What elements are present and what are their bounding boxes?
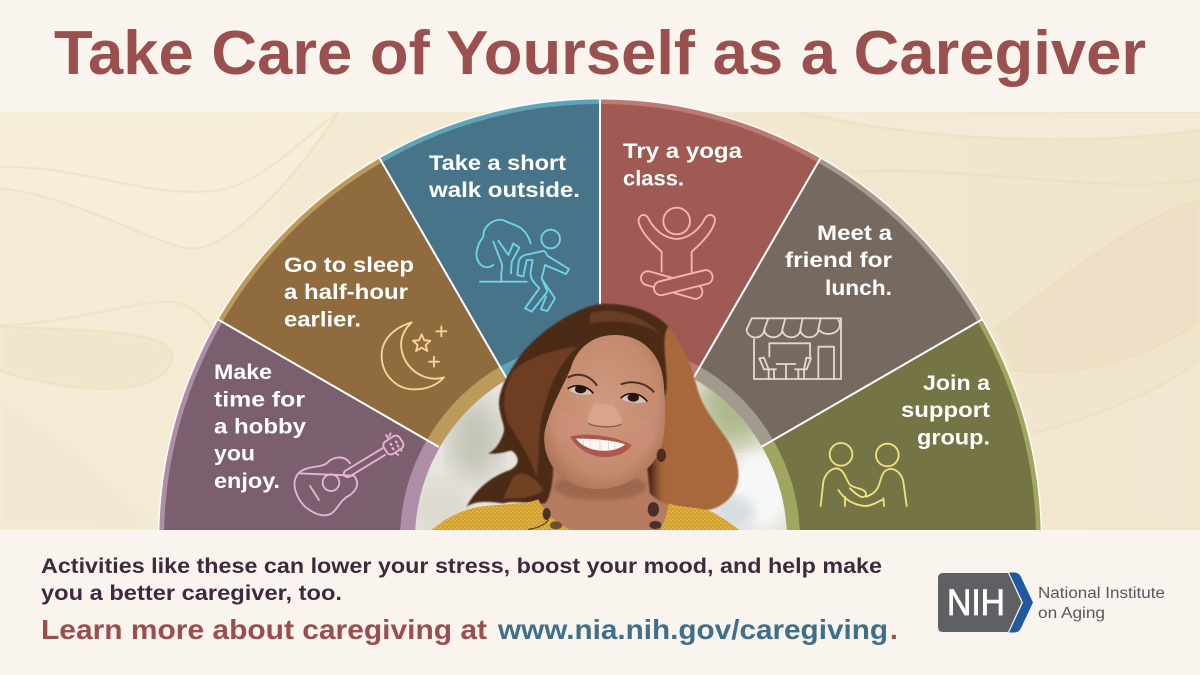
panel: support wedge <box>762 320 1041 530</box>
call to action with link: Learn more about caregiving at <box>41 614 487 645</box>
eyebrows <box>568 375 653 392</box>
text: walk: Take a short <box>429 152 566 175</box>
icon: moon and stars <box>382 322 446 389</box>
logo letters: NIH <box>947 582 1005 623</box>
woman <box>432 304 740 533</box>
text: hobby: Make <box>214 361 272 384</box>
title: Take Care of Yourself as a Caregiver <box>54 19 1146 88</box>
necklace <box>528 502 661 529</box>
body text: Activities like these can lower your stress, boost your mood, and help make <box>41 554 882 578</box>
photo backdrop <box>415 379 787 530</box>
wheel outline and separators <box>158 99 1042 540</box>
text: hobby: you <box>214 442 255 466</box>
eyes <box>568 385 647 403</box>
icon: guitar <box>295 433 405 515</box>
panel: lunch wedge <box>694 159 982 446</box>
icon: tree and walker <box>476 220 569 312</box>
NIH logo <box>938 572 1165 632</box>
panel: yoga wedge <box>601 99 820 376</box>
panel: sleep wedge <box>218 158 507 448</box>
text: support <box>901 372 990 450</box>
face <box>544 335 665 489</box>
text: yoga <box>623 140 742 190</box>
text: hobby: time for <box>214 388 305 412</box>
cheeks <box>553 412 655 448</box>
text: sleep: a half-hour <box>284 281 408 304</box>
mouth <box>570 435 632 457</box>
text: support: Join a <box>923 372 990 395</box>
text: walk: walk outside. <box>428 179 580 202</box>
text: support: support <box>901 399 990 422</box>
call to action with link: www.nia.nih.gov/caregiving <box>497 614 888 645</box>
call to action with link: . <box>890 614 898 645</box>
text: lunch: friend for <box>785 249 892 272</box>
text: sleep <box>284 254 414 332</box>
logo wordmark: National Institute <box>1038 585 1165 602</box>
hair <box>467 304 738 510</box>
text: lunch <box>785 222 892 300</box>
text: yoga: class. <box>623 168 684 190</box>
text: hobby <box>214 361 306 493</box>
panel: walk wedge <box>380 99 599 378</box>
text: walk <box>428 152 580 202</box>
blouse <box>432 499 740 531</box>
neck and chest <box>540 466 668 530</box>
semicircle wheel <box>158 99 1042 540</box>
logo badge <box>938 573 1022 632</box>
text: sleep: Go to sleep <box>284 254 414 277</box>
text: lunch: lunch. <box>825 277 892 300</box>
text: sleep: earlier. <box>284 308 361 332</box>
panel: hobby wedge <box>159 320 440 530</box>
marbled swirl background band <box>0 112 1200 530</box>
body text <box>41 554 882 605</box>
chin shadow <box>553 478 647 501</box>
icon: cafe storefront <box>747 318 841 379</box>
text: support: group. <box>917 426 990 450</box>
photo: smiling woman <box>410 304 795 540</box>
text: hobby: a hobby <box>214 416 306 438</box>
icon: yoga figure <box>639 208 715 300</box>
NIH logo: on Aging <box>1038 605 1105 622</box>
earring <box>657 449 666 462</box>
logo chevron <box>1009 572 1033 632</box>
nose <box>588 403 622 427</box>
icon: two people holding hands <box>821 443 907 506</box>
text: lunch: Meet a <box>817 222 892 245</box>
text: hobby: enjoy. <box>214 470 280 493</box>
text: yoga: Try a yoga <box>623 140 742 163</box>
call to action with link <box>41 614 898 645</box>
body text: you a better caregiver, too. <box>41 581 342 605</box>
